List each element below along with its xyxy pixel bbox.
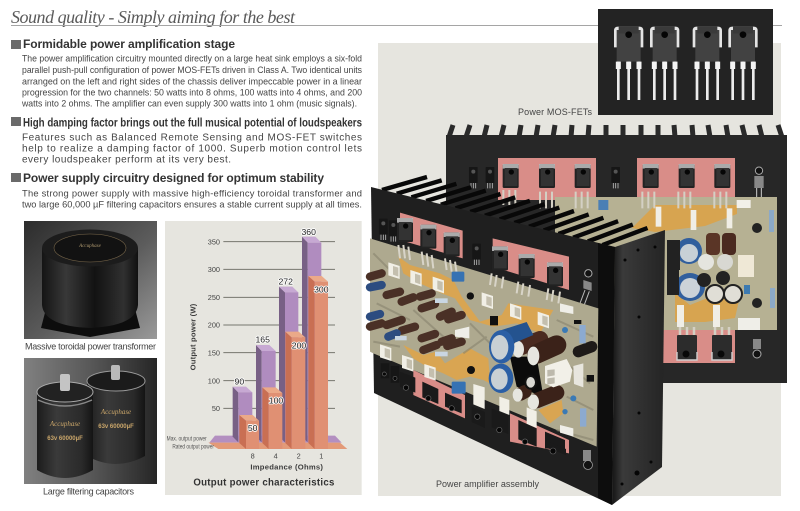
blue film capacitors xyxy=(452,272,464,282)
value labels: 50 xyxy=(248,423,258,433)
front capacitor: 63v 60000µF xyxy=(47,436,83,442)
section: power supply circuitry xyxy=(11,171,362,209)
grid lines and y-axis ticks: 250 xyxy=(208,293,220,302)
large brown capacitors xyxy=(513,339,592,410)
heading: Formidable power amplification stage xyxy=(23,37,235,51)
body text xyxy=(22,187,362,209)
value labels: 165 xyxy=(255,334,270,344)
heat sink fins xyxy=(449,125,782,137)
heat sink body xyxy=(446,135,787,383)
floor: rated output xyxy=(208,443,347,449)
back heat sink assembly xyxy=(446,125,787,383)
body text: two large 60,000 µF filtering capacitors ensures a stable current supply at all times. xyxy=(22,198,362,209)
body text: watts into 2 ohms. The amplifier can even supply 300 watts into 1 ohm (music signals). xyxy=(21,98,357,109)
grid lines and y-axis ticks: 350 xyxy=(208,237,220,246)
back board copper xyxy=(632,205,740,322)
body text: every loudspeaker perform at its very best. xyxy=(22,154,231,165)
photo: toroidal power transformer: Accuphase xyxy=(78,244,102,249)
bars: maximum output xyxy=(233,237,321,442)
front capacitor: Accuphase xyxy=(49,420,80,428)
board copper xyxy=(398,257,563,423)
body text xyxy=(22,132,362,165)
photo inset: power MOS-FETs xyxy=(598,9,773,115)
back capacitors xyxy=(667,210,775,330)
body text: The power amplification circuitry mounted directly on a large heat sink employs a six-fold xyxy=(22,53,362,64)
small electrolytic capacitors xyxy=(370,273,462,350)
caption: amplifier assembly: Power amplifier assembly xyxy=(436,479,540,489)
back transistors, upper row xyxy=(469,164,764,201)
chart panel xyxy=(165,221,362,495)
transistor set xyxy=(614,27,758,100)
floor: max output xyxy=(209,436,342,443)
grid lines and y-axis ticks: 50 xyxy=(212,404,220,413)
back capacitor xyxy=(87,365,145,464)
title: Sound quality - Simply aiming for the best xyxy=(11,7,296,27)
section: damping factor xyxy=(11,116,362,165)
panel: assembly backdrop xyxy=(378,43,781,496)
grid lines and y-axis ticks: 100 xyxy=(208,376,220,385)
grid lines and y-axis ticks: 200 xyxy=(208,321,220,330)
side mounting holes xyxy=(620,246,656,486)
heading: Power supply circuitry designed for optimum stability xyxy=(23,171,324,185)
lower front transistor xyxy=(545,440,566,455)
bullet square xyxy=(11,117,21,126)
grid lines and y-axis ticks xyxy=(208,237,335,413)
board traces xyxy=(373,253,593,440)
chart title: Output power characteristics xyxy=(193,477,334,488)
back transistor leads xyxy=(503,190,751,230)
x-axis ticks xyxy=(251,452,323,461)
x-axis ticks: 1 xyxy=(319,452,323,461)
caption: MOS-FETs: Power MOS-FETs xyxy=(518,107,592,117)
value labels: 200 xyxy=(292,340,306,350)
caption: transformer: Massive toroidal power transformer xyxy=(25,342,156,352)
back transistors, lower row xyxy=(677,305,761,360)
body text: help to realize a damping factor of 1000. Superb motion control lets xyxy=(22,143,362,154)
caption: capacitors: Large filtering capacitors xyxy=(43,486,134,496)
section: power amplification stage xyxy=(11,37,362,109)
back circuit board xyxy=(555,197,777,330)
y-axis title: Output power (W) xyxy=(188,303,197,370)
front panel xyxy=(371,187,615,505)
bullet square xyxy=(11,173,21,182)
cooling fins xyxy=(382,177,648,245)
value labels: 90 xyxy=(235,377,244,387)
x-axis ticks: 4 xyxy=(274,452,278,461)
thermal pads xyxy=(498,158,735,363)
grid lines and y-axis ticks: 150 xyxy=(208,348,220,357)
body text: arranged on the left and right sides of the chassis deliver impeccable power in a linear xyxy=(22,75,362,86)
back capacitor: 63v 60000µF xyxy=(98,424,134,430)
lower thermistor xyxy=(583,450,592,470)
body text xyxy=(21,53,362,109)
dark shadow between capacitors xyxy=(510,357,543,397)
legend labels: Rated output power xyxy=(172,445,214,451)
bars: rated output xyxy=(239,276,328,449)
value labels: 300 xyxy=(314,285,329,295)
photo: filtering capacitors xyxy=(24,358,157,484)
value labels: 272 xyxy=(278,276,293,286)
body text: parallel push-pull configuration of power MOS-FETs driven in Class A. Two identical units xyxy=(22,64,362,75)
front heat sink assembly xyxy=(370,177,665,505)
legend labels xyxy=(167,437,214,451)
grid lines and y-axis ticks: 300 xyxy=(208,265,220,274)
legend labels: Max. output power xyxy=(167,437,207,443)
small parts xyxy=(395,292,594,427)
panel shadow edge xyxy=(598,243,615,505)
value labels: 100 xyxy=(269,396,283,406)
white connectors xyxy=(455,303,583,437)
chart: output power characteristics xyxy=(165,221,362,495)
heading: High damping factor brings out the full musical potential of loudspeakers xyxy=(23,116,362,130)
thermal pads xyxy=(400,213,569,453)
back capacitor: Accuphase xyxy=(100,408,131,416)
front board details xyxy=(370,213,598,453)
body text: Features such as Balanced Remote Sensing and MOS-FET switches xyxy=(22,132,362,143)
lower transistors xyxy=(381,363,565,450)
side face xyxy=(612,230,665,505)
white power resistors xyxy=(380,262,549,428)
value labels: 360 xyxy=(301,227,316,237)
x-axis ticks: 2 xyxy=(297,452,301,461)
value labels xyxy=(235,227,329,433)
photo: toroidal power transformer xyxy=(24,221,157,339)
upper transistors xyxy=(379,218,592,305)
x-axis title: Impedance (Ohms) xyxy=(250,462,323,471)
x-axis ticks: 8 xyxy=(251,452,255,461)
large blue capacitors xyxy=(489,322,533,393)
bullet square xyxy=(11,40,21,49)
circuit board xyxy=(370,238,598,447)
body text: progression for the two channels: 50 watts into 8 ohms, 100 watts into 4 ohms, and 200 xyxy=(22,86,362,98)
front capacitor xyxy=(37,374,93,478)
transistor leads xyxy=(398,245,560,303)
body text: The strong power supply with massive high-efficiency toroidal transformer and xyxy=(22,187,362,198)
